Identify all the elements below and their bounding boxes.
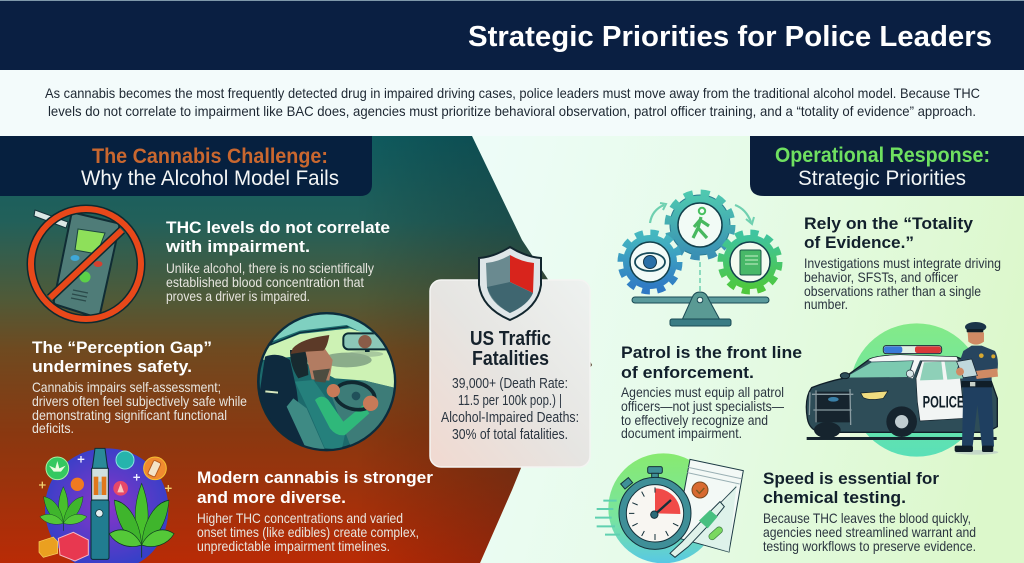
text block: THC levels: Unlike alcohol, there is no scientifically <box>166 261 374 276</box>
intro text block: levels do not correlate to impairment like BAC does, agencies must prioritize behavioral observation, patrol officer training, and a “totality of evidence” approach. <box>48 103 976 119</box>
icon: vape and cannabis products <box>39 448 174 563</box>
panel: US Traffic Fatalities card: Fatalities <box>472 347 549 370</box>
text block: Totality of Evidence: of Evidence.” <box>804 233 914 252</box>
text block: THC levels: established blood concentration that <box>166 275 364 290</box>
text block: THC levels: proves a driver is impaired. <box>166 289 310 304</box>
text block: Speed is essential: testing workflows to preserve evidence. <box>763 539 976 554</box>
text block: Modern cannabis: Modern cannabis is stronger <box>197 468 433 487</box>
text block: Patrol front line: of enforcement. <box>621 363 754 382</box>
card statistics: 39,000+ (Death Rate: <box>452 375 568 392</box>
text block: Modern cannabis: and more diverse. <box>197 488 346 507</box>
text block: Perception Gap: undermines safety. <box>32 357 192 376</box>
text block: Totality of Evidence: Investigations must integrate driving <box>804 256 1001 271</box>
text block: Perception Gap: The “Perception Gap” <box>32 338 212 357</box>
panel: US Traffic Fatalities card <box>430 247 590 467</box>
title: Strategic Priorities for Police Leaders <box>468 21 992 53</box>
panel heading: Operational Response: Operational Response: <box>775 144 990 167</box>
text block: Totality of Evidence: number. <box>804 297 848 312</box>
text block: Patrol front line <box>621 343 802 441</box>
text block: Speed is essential: Because THC leaves the blood quickly, <box>763 511 971 526</box>
text block: Modern cannabis: Higher THC concentrations and varied <box>197 511 403 526</box>
header band <box>0 0 1024 70</box>
text block: Totality of Evidence: behavior, SFSTs, and officer <box>804 270 958 285</box>
text block: Patrol front line: to effectively recognize and <box>621 413 768 428</box>
text block: Speed is essential: Speed is essential for <box>763 469 939 488</box>
text block: Patrol front line: Agencies must equip all patrol <box>621 385 784 400</box>
text block: Patrol front line: officers—not just specialists— <box>621 399 784 414</box>
text block: Totality of Evidence: Rely on the “Totality <box>804 214 974 233</box>
text block: Perception Gap <box>32 338 247 436</box>
text block: Totality of Evidence: observations rather than a single <box>804 284 981 299</box>
card heading: US Traffic <box>470 327 551 350</box>
icon: gears on balance <box>621 193 779 326</box>
icon: shield <box>479 247 541 320</box>
icon: crossed-out breathalyzer <box>31 209 141 319</box>
text block: THC levels <box>165 218 390 304</box>
panel: US Traffic Fatalities card: 30% of total fatalities. <box>452 426 568 443</box>
icon: police car and officer <box>806 322 998 457</box>
panel heading: The Cannabis Challenge: The Cannabis Challenge: <box>92 145 328 168</box>
text block: Patrol front line: Patrol is the front line <box>621 343 802 362</box>
officer <box>955 322 998 455</box>
text block: Patrol front line: document impairment. <box>621 426 742 441</box>
text block: Modern cannabis: unpredictable impairment timelines. <box>197 539 390 554</box>
text block: Totality of Evidence <box>804 214 1001 312</box>
text block: Speed is essential: agencies need streamlined warrant and <box>763 525 976 540</box>
panel heading: Operational Response: Strategic Priorities <box>798 167 966 190</box>
panel: left diagonal challenge background <box>0 136 592 563</box>
panel: US Traffic Fatalities card: Alcohol-Impaired Deaths: <box>441 409 579 426</box>
text block: THC levels: THC levels do not correlate <box>166 218 390 237</box>
text block: Modern cannabis: onset times (like edibles) create complex, <box>197 525 419 540</box>
text block: Perception Gap: drivers often feel subjectively safe while <box>32 394 247 409</box>
text block: Speed is essential: chemical testing. <box>763 488 906 507</box>
icon: police car and officer: POLICE <box>923 392 964 411</box>
text block: Speed is essential <box>763 469 976 554</box>
panel heading: The Cannabis Challenge: Why the Alcohol Model Fails <box>81 167 339 190</box>
icon: stopwatch and evidence bag <box>595 453 743 563</box>
text block: Perception Gap: demonstrating significant functional <box>32 408 227 423</box>
panel heading: The Cannabis Challenge <box>0 136 372 196</box>
panel: US Traffic Fatalities card: 11.5 per 100k pop.) | <box>458 392 562 409</box>
icon: impaired driver circle <box>258 313 397 453</box>
text block: Perception Gap: deficits. <box>32 421 74 436</box>
text block: Perception Gap: Cannabis impairs self-assessment; <box>32 380 221 395</box>
intro text block <box>0 70 1024 136</box>
panel heading: Operational Response <box>750 136 1024 196</box>
text block: THC levels: with impairment. <box>165 237 310 256</box>
text block: Modern cannabis <box>197 468 433 554</box>
